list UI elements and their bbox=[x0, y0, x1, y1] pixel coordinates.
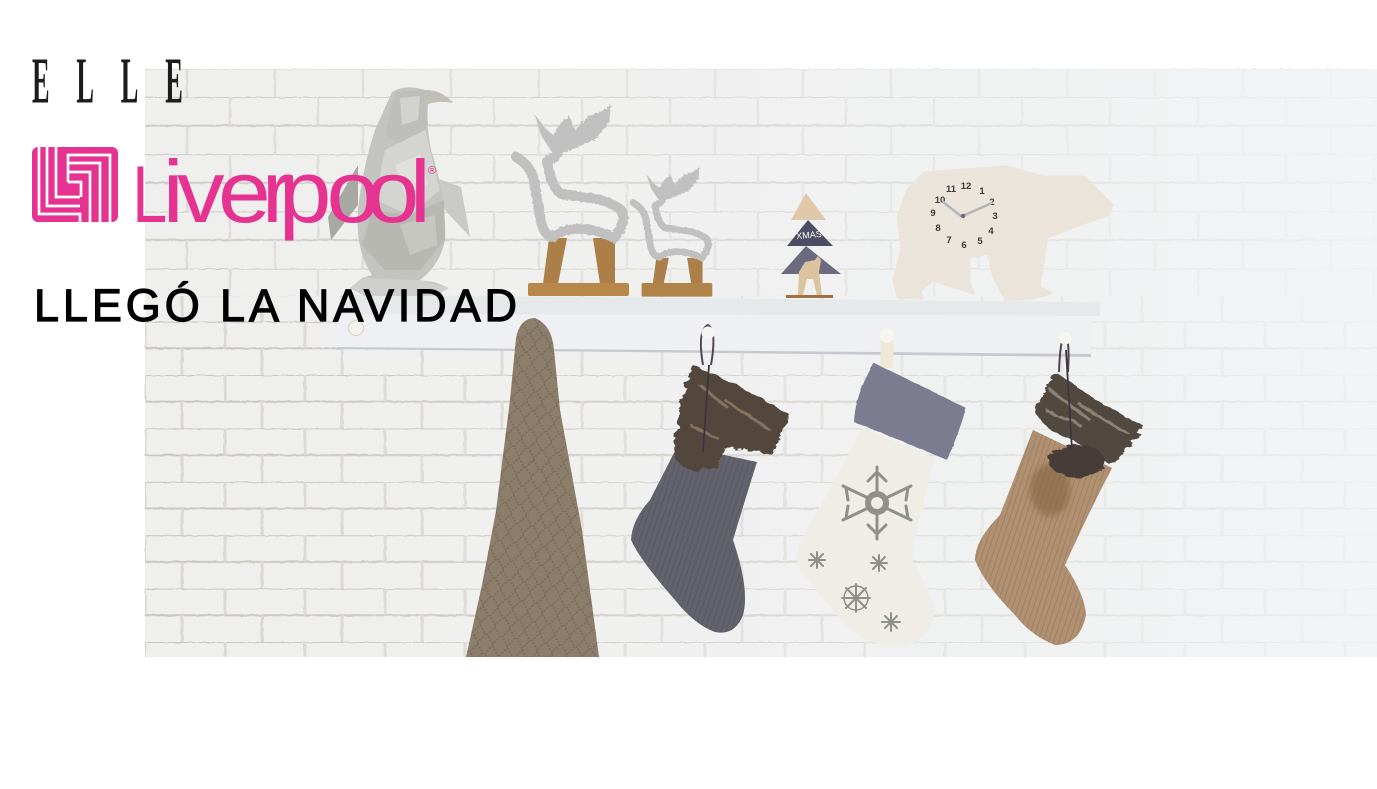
photo: brick wall with shelf and stockings bbox=[145, 69, 1377, 657]
bear clock: 9 bbox=[930, 208, 936, 219]
bear clock: 3 bbox=[992, 211, 998, 222]
ELLE logo: ELLE bbox=[32, 43, 183, 117]
bear clock: 4 bbox=[988, 226, 994, 237]
large reindeer figurine bbox=[516, 105, 629, 296]
small reindeer figurine bbox=[633, 167, 712, 297]
knit blanket bbox=[466, 318, 599, 657]
Liverpool logo bbox=[32, 143, 436, 241]
Liverpool square emblem bbox=[32, 147, 118, 222]
brick wall bbox=[145, 69, 1377, 657]
snowflake embroidery bbox=[809, 467, 911, 631]
tree ornament: XMAS bbox=[796, 229, 822, 241]
bear clock: 5 bbox=[977, 236, 983, 247]
bear clock: 11 bbox=[946, 184, 957, 195]
knobs and loops bbox=[701, 325, 1072, 372]
registered mark: ® bbox=[428, 165, 436, 177]
bear clock: 10 bbox=[935, 195, 945, 206]
bear clock: 8 bbox=[935, 223, 941, 234]
white stocking with snowflakes bbox=[797, 363, 966, 647]
shelf bbox=[336, 295, 1100, 357]
bear clock: 1 bbox=[979, 186, 985, 197]
gray stocking with fur cuff bbox=[631, 365, 790, 633]
tan stocking with fur cuff bbox=[975, 350, 1143, 645]
Liverpool wordmark: L bbox=[132, 150, 167, 240]
bear clock: 12 bbox=[961, 181, 971, 192]
bear clock: 6 bbox=[961, 240, 967, 251]
bear clock: 2 bbox=[989, 197, 995, 208]
headline: LLEGÓ LA NAVIDAD bbox=[34, 280, 517, 331]
tree ornament bbox=[781, 193, 841, 298]
bear clock bbox=[894, 167, 1112, 300]
penguin figurine bbox=[328, 87, 470, 296]
Liverpool wordmark: iverpool bbox=[163, 143, 431, 241]
bear clock: 7 bbox=[946, 235, 952, 246]
